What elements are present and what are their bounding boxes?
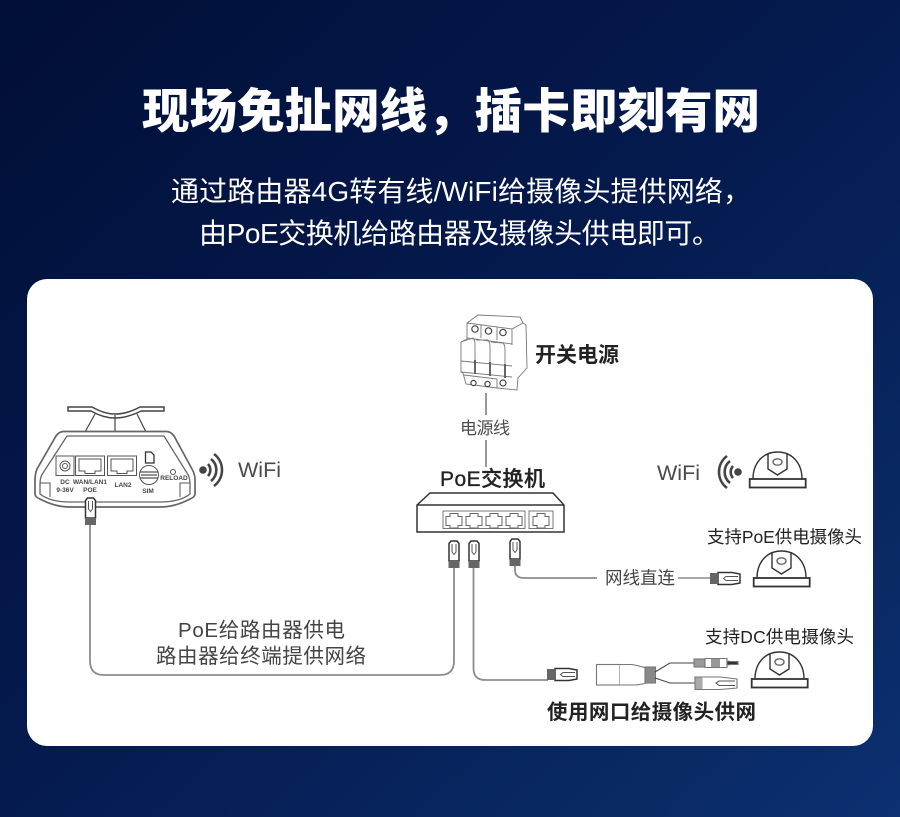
subtitle: 通过路由器4G转有线/WiFi给摄像头提供网络， <box>171 176 751 207</box>
icon: router <box>35 407 195 507</box>
icon: router: RELOAD <box>160 475 188 482</box>
label: WiFi left: WiFi <box>238 458 281 482</box>
cable from switch to PoE adapter <box>474 568 548 680</box>
icon: router: 9-36V <box>56 487 74 494</box>
icon: wifi signal right <box>719 456 742 488</box>
label: wifi right: WiFi <box>657 461 700 485</box>
connector: router plug <box>85 498 96 525</box>
cable to camera <box>678 577 711 579</box>
icon: router: DC <box>60 479 70 486</box>
icon: PoE splitter adapter <box>596 658 738 690</box>
connector: switch plug 2 <box>468 541 480 568</box>
label: power cord: 电源线 <box>460 414 510 439</box>
icon: router: WAN/LAN1 <box>73 479 107 486</box>
icon: wifi camera <box>750 452 806 488</box>
connector: adapter plug <box>547 668 577 680</box>
label: PoE camera: 支持PoE供电摄像头 <box>707 527 862 547</box>
cable from switch to PoE camera <box>515 566 597 578</box>
label: network port power: 使用网口给摄像头供网 <box>547 695 756 725</box>
icon: PoE switch <box>417 493 564 532</box>
icon: PoE camera <box>754 551 810 586</box>
title: 现场免扯网线，插卡即刻有网 <box>142 73 760 142</box>
icon: circuit breaker <box>461 315 527 390</box>
label: PoE switch: PoE交换机 <box>440 468 545 491</box>
connector: camera plug <box>710 572 740 584</box>
icon: DC camera <box>752 652 808 688</box>
label: direct cable: 网线直连 <box>605 565 676 590</box>
connector: switch plug 1 <box>448 541 460 568</box>
subtitle: 由PoE交换机给路由器及摄像头供电即可。 <box>199 218 720 249</box>
icon: wifi signal left <box>199 454 222 486</box>
connector: switch plug 3 <box>510 539 520 566</box>
label: switch power: 开关电源 <box>535 339 619 369</box>
icon: router: SIM <box>142 488 154 495</box>
subtitle <box>171 176 751 249</box>
label: DC camera: 支持DC供电摄像头 <box>705 627 854 647</box>
label: router to terminal: 路由器给终端提供网络 <box>156 639 366 669</box>
icon: router: POE <box>83 487 98 494</box>
label: PoE to router: PoE给路由器供电 <box>178 619 345 642</box>
PoE cable from switch to router <box>90 524 454 675</box>
panel: wiring diagram <box>27 279 873 746</box>
power cord <box>485 393 487 467</box>
icon: router: LAN2 <box>115 482 132 489</box>
